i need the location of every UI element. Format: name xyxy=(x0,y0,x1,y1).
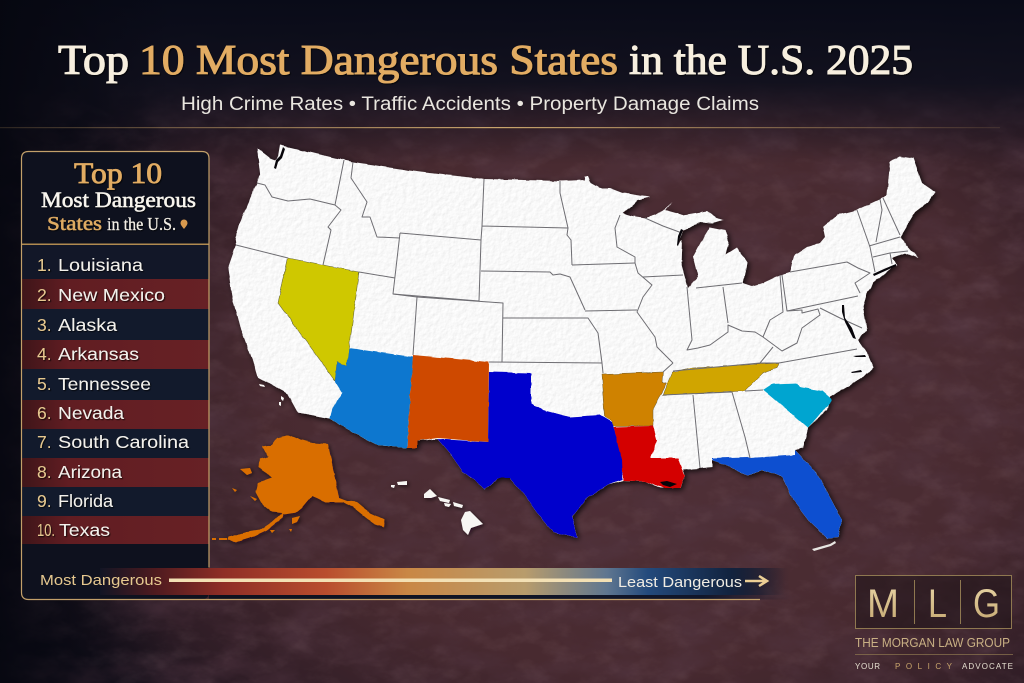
ranked list: 2. xyxy=(37,285,52,305)
ranked list: 1. xyxy=(37,255,52,275)
ranked list: New Mexico xyxy=(58,285,165,305)
ranked list: Florida xyxy=(58,491,113,511)
ranked list: Louisiana xyxy=(58,255,143,275)
list row backgrounds xyxy=(22,245,209,544)
ranked list xyxy=(37,255,189,540)
ranked list: 5. xyxy=(37,374,52,394)
ranked list: 9. xyxy=(37,491,52,511)
title xyxy=(58,38,913,84)
logo: The Morgan Law Group xyxy=(855,576,1013,671)
state borders xyxy=(236,160,908,468)
logo letters: M xyxy=(867,582,899,626)
ranked list: 3. xyxy=(37,315,52,335)
logo letters xyxy=(867,582,1000,626)
panel border xyxy=(209,566,770,568)
ranked list: Texas xyxy=(59,520,110,540)
ranked list: Alaska xyxy=(58,315,117,335)
ranked list: Arkansas xyxy=(58,344,139,364)
scale label: least dangerous: Least Dangerous xyxy=(618,575,742,591)
map: Alaska xyxy=(212,435,385,542)
ranked list: Arizona xyxy=(58,462,122,482)
logo tagline: YOUR xyxy=(855,662,880,671)
ranked list: 8. xyxy=(37,462,52,482)
logo name: THE MORGAN LAW GROUP xyxy=(855,635,1010,650)
ranked list: 6. xyxy=(37,403,52,423)
panel heading: in the U.S. xyxy=(107,214,176,234)
subtitle: High Crime Rates • Traffic Accidents • Property Damage Claims xyxy=(181,94,759,115)
title: in the U.S. 2025 xyxy=(629,38,913,84)
landmass outline xyxy=(228,145,935,538)
map: California islands xyxy=(259,384,284,406)
ranked list: Nevada xyxy=(58,403,124,423)
state: Texas xyxy=(438,372,623,538)
logo letters: L xyxy=(928,582,947,626)
state: Arkansas xyxy=(602,372,667,426)
map: contiguous United States xyxy=(228,145,935,538)
state: Tennessee xyxy=(663,363,779,395)
colored states xyxy=(278,258,842,538)
bays and sounds xyxy=(274,147,896,487)
logo tagline xyxy=(855,662,1013,671)
ranked list: 4. xyxy=(37,344,52,364)
state: Nevada xyxy=(278,258,359,381)
state: New Mexico xyxy=(407,355,489,448)
title: Top xyxy=(58,38,129,84)
arrow xyxy=(745,576,767,586)
state: South Carolina xyxy=(763,383,832,428)
logo letters: G xyxy=(973,582,1000,626)
map: Hawaii xyxy=(391,481,483,535)
panel heading: Most Dangerous xyxy=(41,187,196,212)
state: Florida xyxy=(712,450,842,538)
state: Louisiana xyxy=(613,426,685,488)
ranked list: Tennessee xyxy=(58,374,151,394)
logo tagline: ADVOCATE xyxy=(962,662,1013,671)
ranked list: 7. xyxy=(37,432,52,452)
title: 10 Most Dangerous States xyxy=(139,38,618,84)
danger scale bar xyxy=(40,568,790,600)
state: Arizona xyxy=(330,348,413,448)
panel heading xyxy=(41,157,196,235)
panel heading: States xyxy=(47,213,102,235)
logo tagline: POLICY xyxy=(895,662,953,671)
icon: location pin xyxy=(180,220,188,229)
ranked list: 10. xyxy=(37,520,55,540)
panel: top 10 list xyxy=(22,152,209,600)
scale label: most dangerous: Most Dangerous xyxy=(40,573,162,589)
map: Florida Keys xyxy=(812,541,836,551)
panel heading: Top 10 xyxy=(74,157,162,190)
ranked list: South Carolina xyxy=(58,432,189,452)
